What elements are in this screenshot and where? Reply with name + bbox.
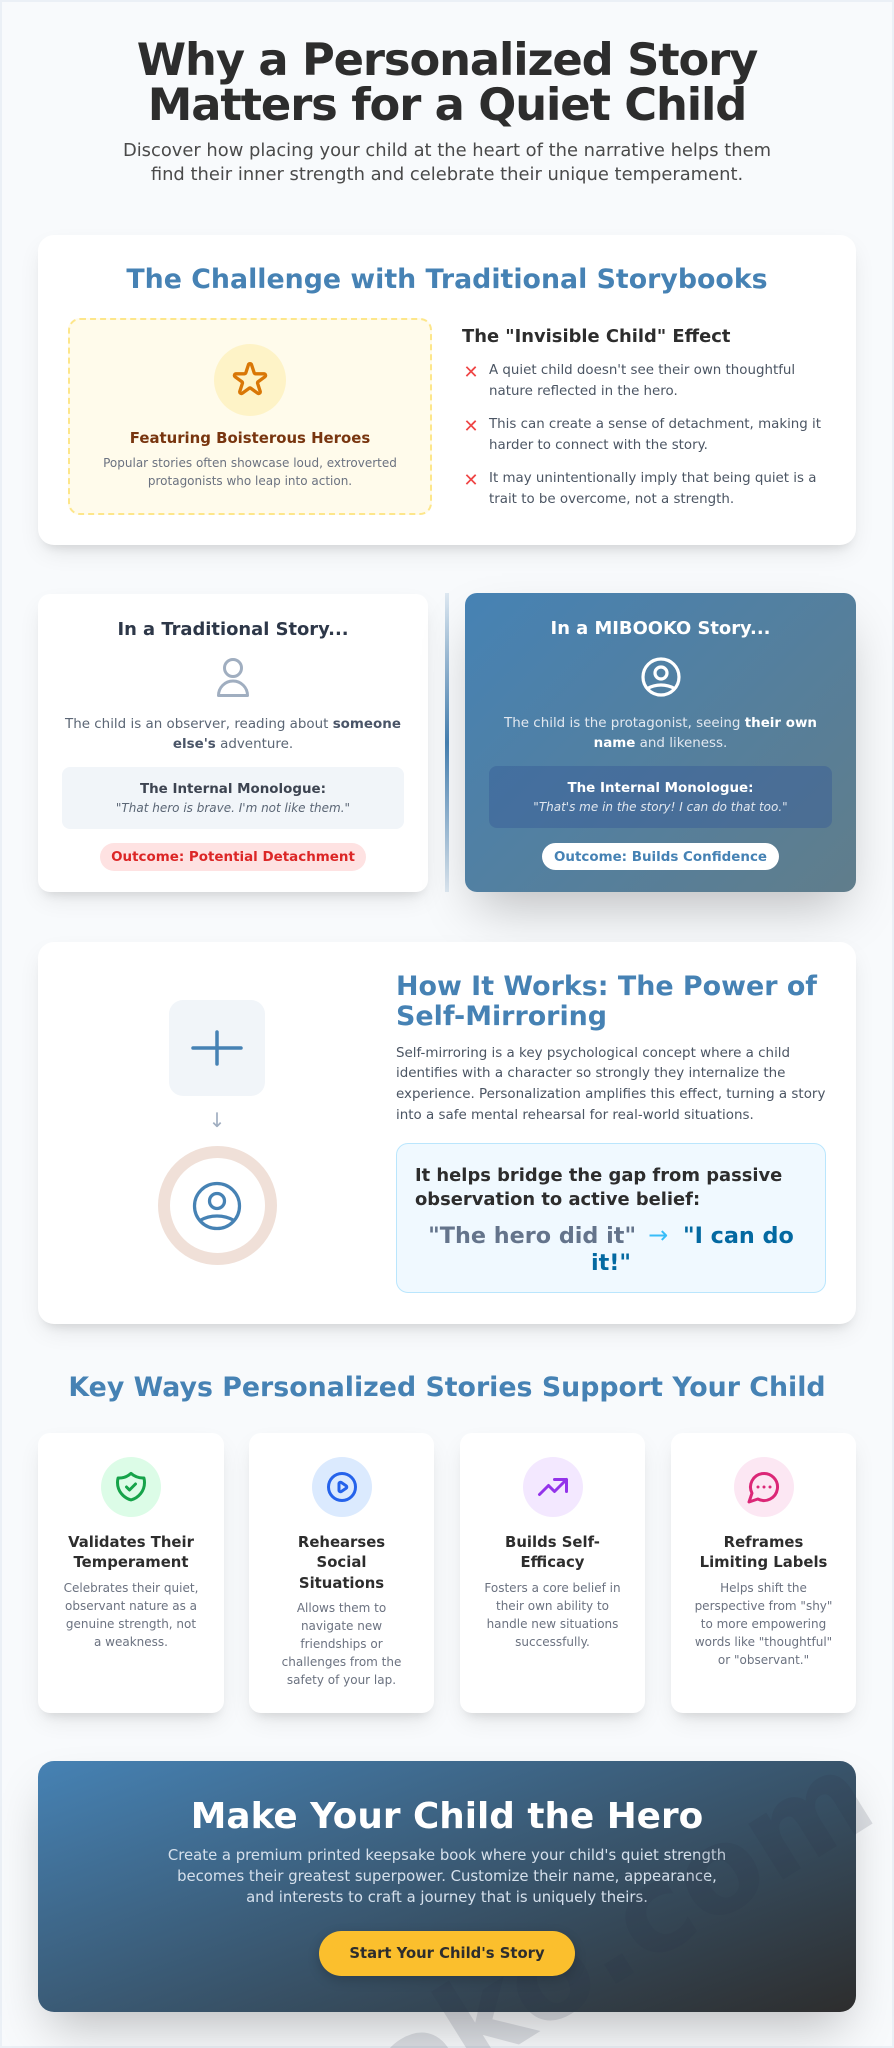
title: Why a Personalized Story [137, 33, 757, 86]
heading: mibooko: In a MIBOOKO Story... [551, 618, 770, 639]
boisterous heading: Featuring Boisterous Heroes [130, 429, 370, 447]
monologue box [489, 766, 832, 828]
icon: person in circle [641, 657, 681, 697]
card title: Reframes [724, 1532, 803, 1550]
icon: x mark 3: ✕ [463, 470, 479, 491]
card text [695, 1581, 832, 1667]
mibooko text [504, 716, 817, 751]
cta heading: Make Your Child the Hero [191, 1796, 703, 1836]
callout text [415, 1164, 782, 1210]
card text [64, 1581, 198, 1649]
card text: Allows them to [297, 1601, 386, 1615]
card text: friendships or [300, 1637, 383, 1651]
monologue quote: "That's me in the story! I can do that too." [533, 800, 788, 814]
panel: reframes [671, 1433, 856, 1713]
mirror ring [158, 1146, 276, 1265]
card text: a weakness. [94, 1635, 168, 1649]
monologue heading: The Internal Monologue: [140, 782, 326, 797]
panel: call to action [38, 1761, 856, 2012]
card text [484, 1581, 621, 1649]
heading: how it works [396, 970, 818, 1032]
card title: Situations [299, 1574, 384, 1592]
explanation: Self-mirroring is a key psychological concept where a child [396, 1046, 790, 1060]
monologue heading: The Internal Monologue: [567, 781, 754, 796]
list item 3 [489, 470, 816, 506]
card text: their own ability to [496, 1599, 609, 1613]
subtitle [123, 140, 771, 185]
traditional text: else's adventure. [173, 737, 293, 752]
card title [68, 1532, 194, 1571]
icon: chat [734, 1457, 794, 1517]
icon: trend [523, 1457, 583, 1517]
title: Matters for a Quiet Child [148, 78, 746, 131]
panel: validates [38, 1433, 224, 1713]
outcome pill [542, 843, 779, 870]
icon: child [192, 1182, 242, 1230]
icon: plus [191, 1030, 243, 1066]
card title: Social [317, 1553, 366, 1571]
callout quote: it!" [591, 1250, 631, 1276]
card text: Fosters a core belief in [484, 1581, 621, 1595]
callout quote: "The hero did it" → "I can do [428, 1221, 794, 1249]
list item 2: This can create a sense of detachment, making it [489, 416, 821, 432]
list item 3: It may unintentionally imply that being quiet is a [489, 470, 816, 486]
card title: Rehearses [298, 1532, 385, 1550]
card title [505, 1532, 600, 1571]
icon: x mark 2: ✕ [463, 416, 479, 437]
cta text: and interests to craft a journey that is uniquely theirs. [246, 1888, 648, 1906]
card text: challenges from the [282, 1655, 401, 1669]
heading: traditional: In a Traditional Story... [117, 619, 349, 640]
panel: boisterous heroes [68, 318, 432, 515]
card title: Builds Self- [505, 1532, 600, 1550]
heading: key ways: Key Ways Personalized Stories Support Your Child [68, 1372, 826, 1403]
boisterous text [103, 456, 397, 488]
heading: invisible child: The "Invisible Child" Effect [462, 326, 730, 347]
card text: handle new situations [487, 1617, 618, 1631]
mibooko text: name and likeness. [594, 736, 727, 751]
icon: play [312, 1457, 372, 1517]
cta text: Create a premium printed keepsake book where your child's quiet strength [168, 1846, 726, 1864]
list item 1: A quiet child doesn't see their own thoughtful [489, 363, 795, 378]
card text: words like "thoughtful" [695, 1635, 832, 1649]
cta text: becomes their greatest superpower. Customize their name, appearance, [177, 1867, 717, 1885]
traditional text: The child is an observer, reading about someone [65, 716, 401, 732]
subtitle: find their inner strength and celebrate their unique temperament. [151, 164, 743, 185]
card text: safety of your lap. [287, 1673, 396, 1687]
card text: genuine strength, not [66, 1617, 196, 1631]
explanation: identifies with a character so strongly they internalize the [396, 1066, 785, 1081]
icon: shield [101, 1457, 161, 1517]
card text: Helps shift the [720, 1581, 807, 1595]
card text: or "observant." [718, 1653, 809, 1667]
panel: traditional story [38, 594, 428, 892]
traditional text [64, 716, 401, 752]
cta text [168, 1846, 726, 1906]
list item 3: trait to be overcome, not a strength. [489, 492, 734, 506]
mibooko text: The child is the protagonist, seeing their own [504, 716, 817, 730]
card title: Temperament [74, 1553, 188, 1571]
heading: how it works: How It Works: The Power of [396, 970, 817, 1002]
heading: how it works: Self-Mirroring [396, 1000, 607, 1032]
panel: challenge [38, 235, 856, 545]
callout quote [428, 1221, 794, 1276]
callout [396, 1143, 826, 1293]
list item 1 [489, 363, 795, 399]
boisterous text: Popular stories often showcase loud, extroverted [103, 456, 397, 470]
card text: navigate new [301, 1619, 382, 1633]
monologue box [62, 767, 404, 829]
plus tile [169, 1000, 265, 1096]
card text: perspective from "shy" [695, 1599, 832, 1613]
arrow: down: ↓ [209, 1108, 225, 1132]
card title [700, 1532, 827, 1571]
explanation: into a safe mental rehearsal for real-world situations. [396, 1108, 754, 1123]
callout text: observation to active belief: [415, 1188, 700, 1210]
list item 1: nature reflected in the hero. [489, 384, 678, 399]
heading: challenge: The Challenge with Traditional Storybooks [126, 264, 768, 295]
list item 2: harder to connect with the story. [489, 438, 708, 452]
icon: star [214, 344, 286, 416]
panel: rehearses [249, 1433, 434, 1713]
subtitle: Discover how placing your child at the heart of the narrative helps them [123, 140, 771, 161]
boisterous text: protagonists who leap into action. [148, 474, 352, 488]
list item 2 [488, 416, 821, 452]
monologue quote: "That hero is brave. I'm not like them." [116, 801, 350, 815]
card title: Validates Their [68, 1532, 194, 1550]
panel: self-efficacy [460, 1433, 645, 1713]
card text: observant nature as a [65, 1599, 197, 1613]
outcome pill [100, 843, 366, 871]
explanation: experience. Personalization amplifies this effect, turning a story [396, 1087, 825, 1102]
divider [445, 593, 449, 892]
card text: successfully. [515, 1635, 590, 1649]
card title: Efficacy [520, 1553, 584, 1571]
outcome pill: Outcome: Builds Confidence [554, 850, 767, 865]
icon: person [217, 658, 249, 697]
callout text: It helps bridge the gap from passive [415, 1164, 782, 1186]
cta button [319, 1931, 575, 1976]
panel: how it works [38, 942, 856, 1324]
outcome pill: Outcome: Potential Detachment [111, 850, 355, 865]
card text: Celebrates their quiet, [64, 1581, 198, 1595]
card text [282, 1601, 401, 1687]
panel: mibooko story [465, 593, 856, 892]
card title [298, 1532, 385, 1592]
title [137, 33, 758, 131]
cta button: Start Your Child's Story [349, 1945, 545, 1962]
card text: to more empowering [701, 1617, 826, 1631]
icon: x mark 1: ✕ [463, 362, 479, 383]
explanation [396, 1046, 825, 1123]
card title: Limiting Labels [700, 1553, 827, 1571]
